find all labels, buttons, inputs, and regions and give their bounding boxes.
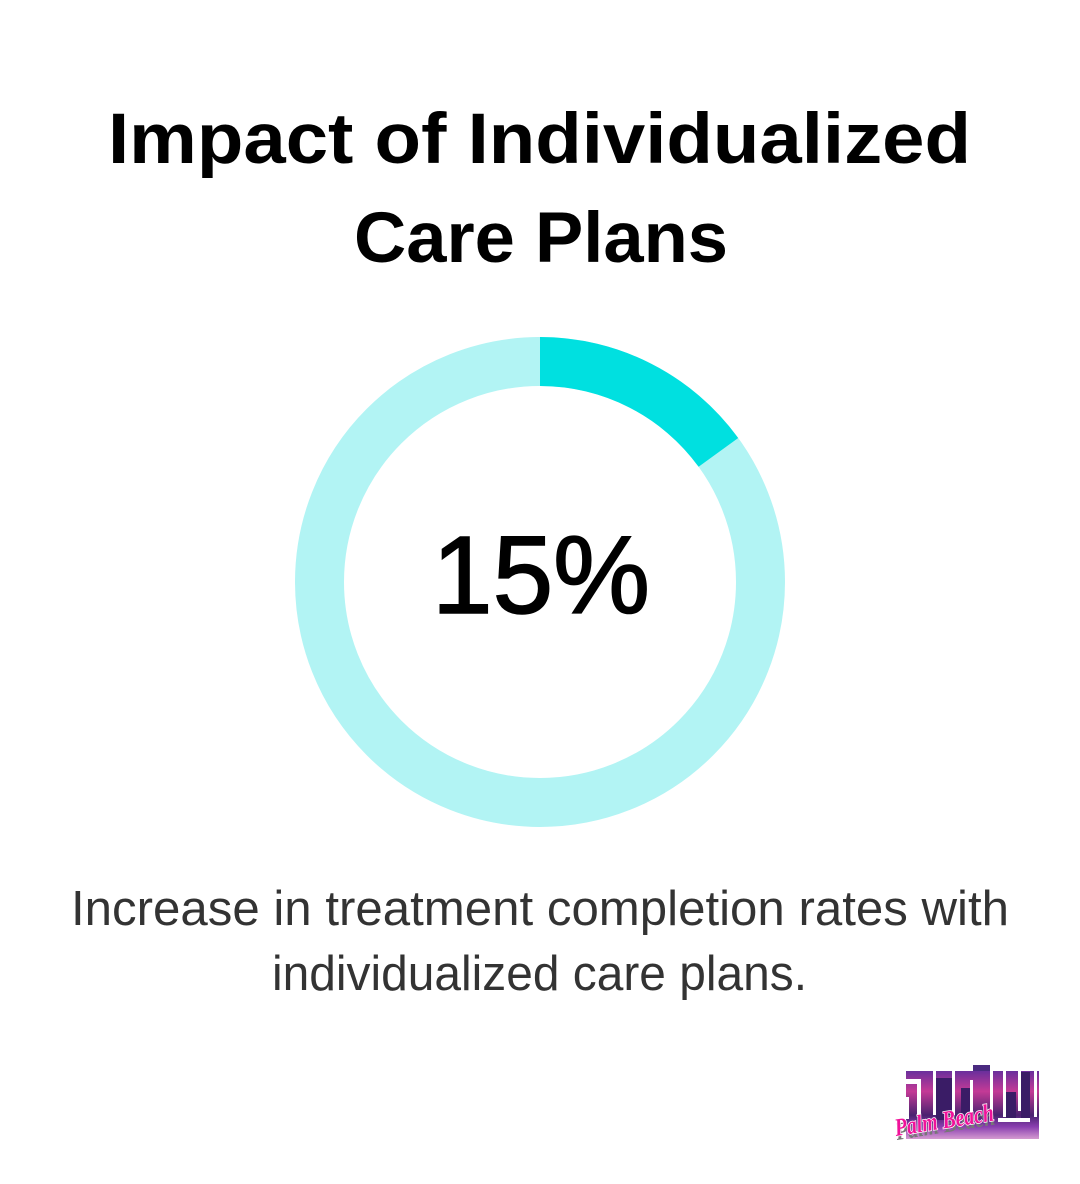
caption: individualized care plans. — [272, 947, 807, 1001]
title: Care Plans — [354, 199, 728, 278]
caption — [71, 882, 1009, 1001]
logo image block — [906, 1071, 1039, 1139]
logo: amity Palm Beach: Palm Beach — [892, 1100, 996, 1142]
ring highlighted segment — [540, 337, 738, 467]
percentage value: 15% — [432, 514, 650, 637]
logo: amity Palm Beach — [892, 1065, 1039, 1146]
title — [108, 100, 971, 278]
title: Impact of Individualized — [108, 100, 971, 179]
caption: Increase in treatment completion rates with — [71, 882, 1009, 936]
logo script text: Palm Beach — [893, 1104, 997, 1146]
logo letter cut-outs — [906, 1071, 1037, 1122]
ring track — [320, 362, 760, 802]
donut chart: 15% — [320, 337, 760, 802]
logo buildings — [936, 1072, 1030, 1120]
